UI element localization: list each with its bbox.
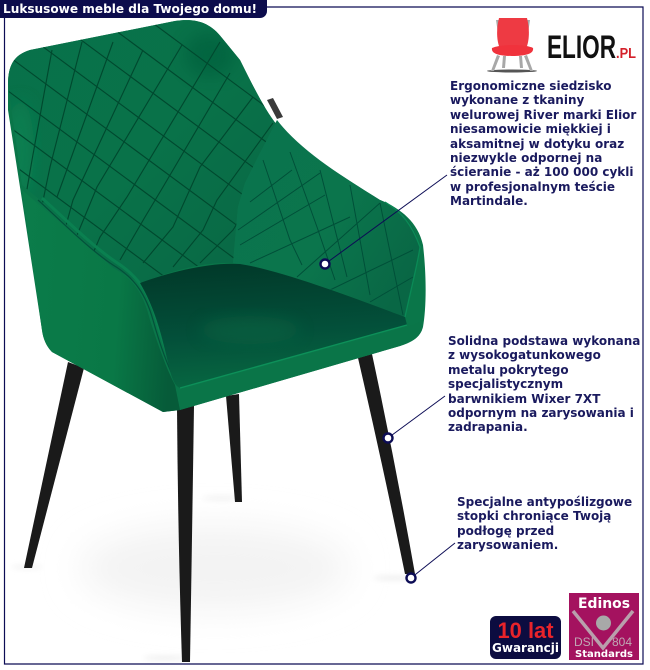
badge: Edinos standards: [569, 593, 639, 660]
text block: metal base: odpornym na zarysowania i: [448, 406, 634, 420]
header banner: Luksusowe meble dla Twojego domu!: [3, 2, 257, 16]
text block: fabric seat: w profesjonalnym teście: [450, 180, 615, 194]
text block: fabric seat: [450, 79, 636, 208]
text block: metal base: specjalistycznym: [448, 377, 563, 391]
label tag: [267, 98, 283, 119]
backrest quilting: [8, 20, 276, 282]
logo wordmark: .PL: [616, 45, 636, 62]
logo wordmark: ELIOR: [547, 29, 616, 65]
text block: fabric seat: aksamitnej w dotyku oraz: [450, 137, 624, 151]
badge: Edinos standards: 804: [612, 635, 632, 649]
badge: Edinos standards: Edinos: [578, 596, 630, 612]
right arm rim: [385, 202, 420, 317]
badge: Edinos standards: DSI: [574, 635, 594, 649]
text block: metal base: z wysokogatunkowego: [448, 348, 601, 362]
text block: metal base: barwnikiem Wixer 7XT: [448, 392, 600, 406]
text block: metal base: Solidna podstawa wykonana: [448, 334, 640, 348]
seat: [140, 264, 407, 388]
badge: 10 year warranty: [490, 616, 561, 659]
text block: fabric seat: Martindale.: [450, 194, 528, 208]
text block: anti-slip feet: Specjalne antypoślizgowe: [457, 495, 632, 509]
callout: feet: [406, 543, 455, 582]
seat highlight: [200, 316, 300, 344]
text block: fabric seat: wykonane z tkaniny: [450, 93, 584, 107]
text block: metal base: [448, 334, 640, 434]
text block: fabric seat: Ergonomiczne siedzisko: [450, 79, 611, 93]
left arm rim: [42, 198, 180, 386]
text block: metal base: metalu pokrytego: [448, 363, 569, 377]
front seat edge: [180, 322, 422, 410]
text block: anti-slip feet: [457, 495, 632, 552]
text block: fabric seat: welurowej River marki Elior: [450, 108, 636, 122]
text block: fabric seat: ścieranie - aż 100 000 cykli: [450, 165, 634, 179]
badge: Edinos standards: Standards: [575, 649, 633, 660]
left arm seam: [38, 200, 178, 386]
badge: 10 year warranty: Gwarancji: [492, 641, 559, 655]
text block: fabric seat: niezwykle odpornej na: [450, 151, 602, 165]
chair upholstery: [0, 0, 430, 412]
silhouette: [8, 20, 426, 412]
chair legs: [24, 354, 415, 662]
callout lines and dots: [320, 175, 455, 582]
callout: base: [384, 396, 445, 442]
text block: anti-slip feet: stopki chroniące Twoją: [457, 509, 611, 523]
text block: metal base: zadrapania.: [448, 420, 528, 434]
callout: fabric: [320, 175, 447, 268]
left outer arm: [22, 190, 180, 412]
icon: red chair logo: [487, 18, 537, 72]
text block: fabric seat: niesamowicie miękkiej i: [450, 122, 611, 136]
text block: anti-slip feet: zarysowaniem.: [457, 538, 558, 552]
text block: anti-slip feet: podłogę przed: [457, 524, 554, 538]
badge: 10 year warranty: 10 lat: [498, 618, 554, 643]
floor shadow: [11, 496, 417, 660]
right arm inner quilting: [238, 120, 420, 316]
